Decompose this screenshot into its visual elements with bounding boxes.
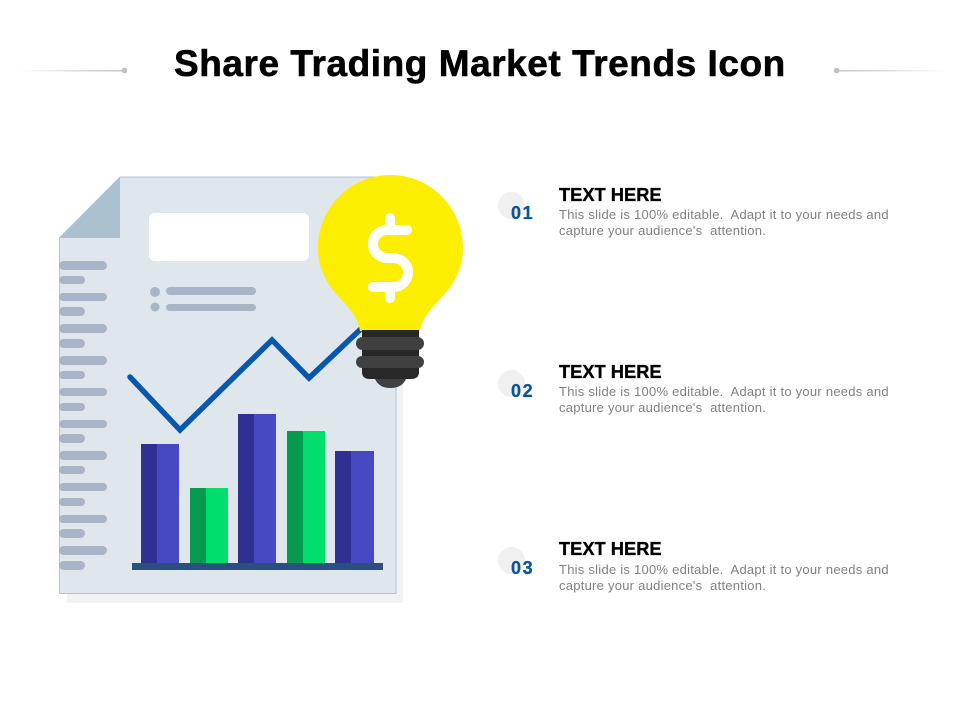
heading 01: TEXT HERE — [559, 184, 662, 205]
illustration: report with chart and light bulb — [59, 175, 463, 603]
heading 03: TEXT HERE — [559, 538, 662, 559]
trend line — [130, 326, 364, 430]
icon: light bulb — [318, 175, 463, 388]
number badge 02 — [498, 370, 525, 397]
item 03 — [498, 538, 889, 593]
heading 02: TEXT HERE — [559, 361, 662, 382]
body text 03 — [559, 562, 889, 593]
body text 02 — [559, 384, 889, 415]
body text 03: This slide is 100% editable. Adapt it to your needs and — [559, 562, 889, 577]
number badge 01 — [498, 192, 525, 219]
number 03: 03 — [511, 558, 534, 578]
number badge 03 — [498, 547, 525, 574]
item 02 — [498, 361, 889, 415]
bullet lines — [150, 287, 256, 312]
body text 02: capture your audience's attention. — [559, 400, 766, 415]
header box — [149, 213, 309, 261]
body text 01: This slide is 100% editable. Adapt it to your needs and — [559, 207, 889, 222]
paper shadow — [67, 240, 403, 603]
bulb glass — [318, 175, 463, 331]
margin text lines — [59, 261, 107, 570]
title: Share Trading Market Trends Icon — [174, 43, 786, 84]
folded corner — [59, 177, 120, 238]
body text 01: capture your audience's attention. — [559, 223, 766, 238]
item 01 — [498, 184, 889, 238]
paper document — [60, 177, 396, 594]
decorative title rules — [30, 68, 934, 74]
number 01: 01 — [511, 203, 534, 223]
number 02: 02 — [511, 381, 534, 401]
dollar sign — [373, 218, 408, 298]
bulb cap — [362, 330, 419, 379]
body text 01 — [559, 207, 889, 238]
body text 02: This slide is 100% editable. Adapt it to your needs and — [559, 384, 889, 399]
bar chart — [132, 414, 383, 570]
body text 03: capture your audience's attention. — [559, 578, 766, 593]
